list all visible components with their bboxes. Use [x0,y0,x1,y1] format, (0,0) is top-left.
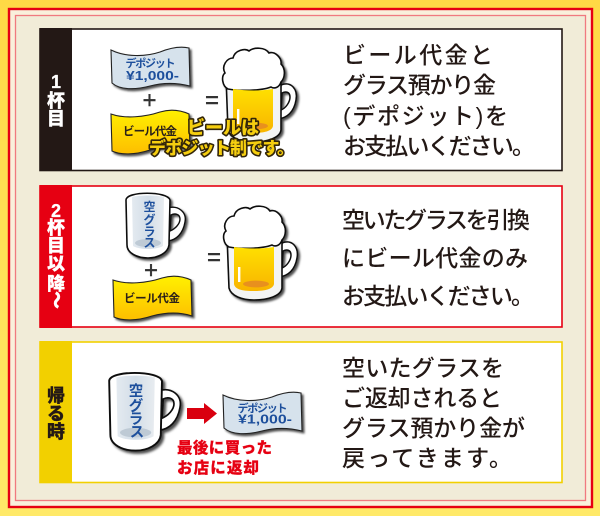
deposit system callout: ビールは [187,117,259,138]
panel 1 instructions: ビール代金と [343,42,493,68]
beer price banner: ビール代金 [124,291,180,305]
deposit banner [223,392,302,434]
equals sign: = [207,244,221,271]
beer price banner [113,276,192,320]
panel 3 instructions: 戻ってきます。 [342,445,512,471]
beer price banner: ビール代金 [123,124,178,138]
panel 3 instructions: ご返却されると [342,385,502,411]
return note [177,438,272,477]
panel 3 box [40,342,562,482]
return note: 最後に買った [177,438,272,457]
icon: full beer mug [223,48,296,142]
deposit system callout [149,117,294,158]
panel 1 instructions [343,42,535,159]
panel: first glass [40,28,562,171]
panel: when leaving [40,341,562,483]
panel 1 instructions: グラス預かり金 [343,72,496,98]
empty glass mug: 空グラス [143,199,156,250]
plus sign: + [142,87,157,114]
icon: red arrow [187,403,217,424]
panel 2 instructions [342,207,534,309]
empty glass mug [109,373,180,451]
panel: second glass onward [40,185,562,328]
panel 1 instructions: お支払いください。 [343,133,535,159]
panel 1 side tab [40,28,72,171]
empty glass mug [126,193,185,258]
deposit banner: デポジット [126,56,176,70]
deposit banner: デポジット [238,401,288,415]
panel 3 instructions [342,355,525,471]
panel 3 instructions: 空いたグラスを [342,355,504,381]
empty glass mug: 空グラス [129,382,144,441]
panel 1 tab label: 1杯目 [47,72,65,129]
panel 2 instructions: 空いたグラスを引換 [342,207,530,233]
icon: full beer mug [224,206,297,300]
beer price banner [111,110,190,154]
deposit banner: ¥1,000- [126,69,179,83]
panel 2 side tab [40,185,72,328]
panel 1 instructions: (デポジット)を [343,103,508,129]
panel 2 instructions: お支払いください。 [342,283,534,309]
panel 3 side tab [40,341,72,483]
deposit banner: ¥1,000- [238,412,292,426]
panel 3 instructions: グラス預かり金が [342,415,525,441]
deposit banner [111,47,190,89]
plus sign: + [144,257,158,284]
panel 2 box [40,186,562,327]
return note: お店に返却 [177,458,259,477]
panel 1 box [40,29,562,170]
panel 2 tab label: 2杯目以降〜 [46,201,66,309]
panel 3 tab label: 帰る時 [47,386,65,442]
deposit system callout: デポジット制です。 [149,138,294,158]
panel 2 instructions: にビール代金のみ [342,245,528,271]
equals sign: = [205,87,219,114]
